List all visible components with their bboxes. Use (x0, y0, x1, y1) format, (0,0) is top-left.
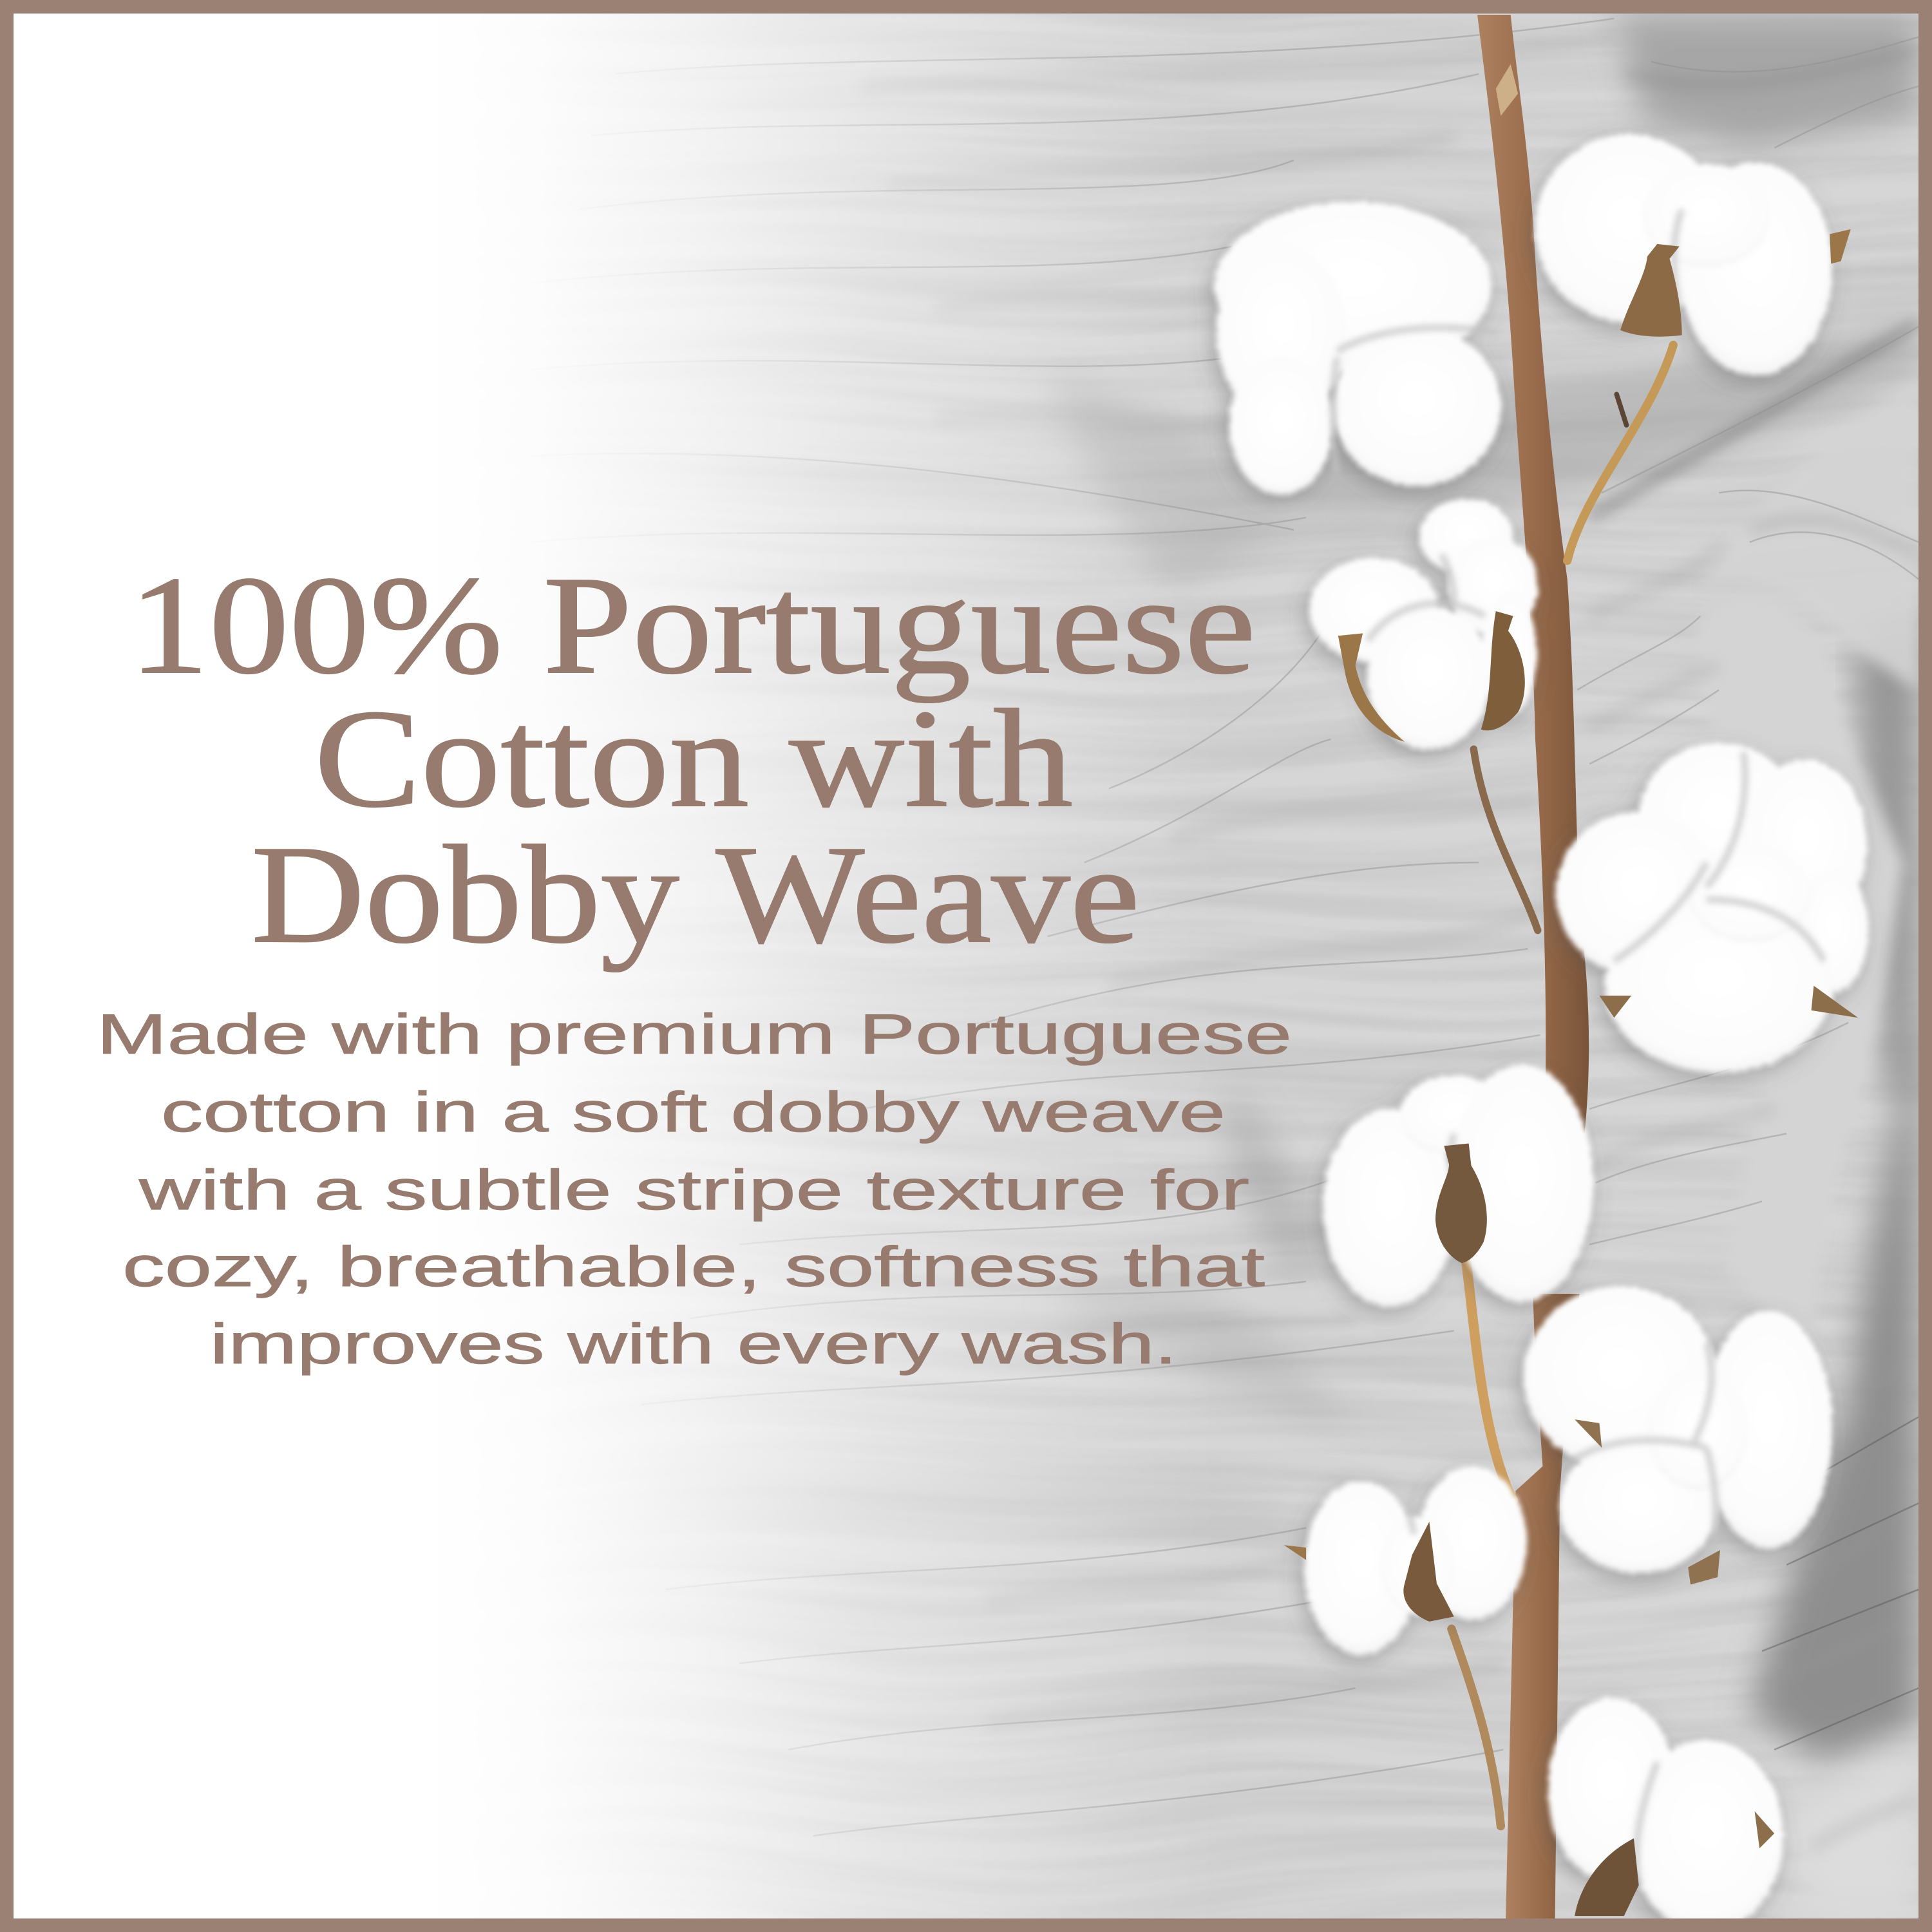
stem knot (1496, 64, 1518, 116)
fabric weave stripes (530, 19, 1918, 1836)
description text: improves with every wash. (210, 1312, 1177, 1376)
cotton boll 2 (1535, 135, 1832, 375)
title (129, 548, 1256, 972)
cotton calyxes and sepals (1284, 229, 1858, 1916)
fabric fold right (1694, 382, 1918, 1356)
fabric soft bands (862, 37, 1918, 1848)
title: Dobby Weave (251, 817, 1140, 972)
description text: cotton in a soft dobby weave (161, 1080, 1226, 1144)
description text: with a subtle stripe texture for (138, 1158, 1249, 1222)
side twigs (1452, 345, 1673, 1826)
title: Cotton with (314, 681, 1073, 837)
description text: cozy, breathable, softness that (122, 1235, 1265, 1298)
cotton boll 4 (1556, 743, 1868, 1072)
cotton boll 8 (1548, 1698, 1783, 1932)
description text (97, 1002, 1292, 1376)
cotton boll 3 (1310, 499, 1538, 749)
cotton boll 7 (1305, 1466, 1527, 1654)
fabric shadows (641, 15, 1918, 1918)
cotton boll 5 (1323, 1065, 1593, 1306)
description text: Made with premium Portuguese (97, 1002, 1292, 1066)
cotton boll creases (1333, 209, 1824, 1885)
cotton boll 1 (1215, 202, 1501, 494)
cotton boll 6 (1524, 1286, 1832, 1572)
title: 100% Portuguese (129, 548, 1256, 703)
cotton stem (1477, 15, 1589, 1918)
